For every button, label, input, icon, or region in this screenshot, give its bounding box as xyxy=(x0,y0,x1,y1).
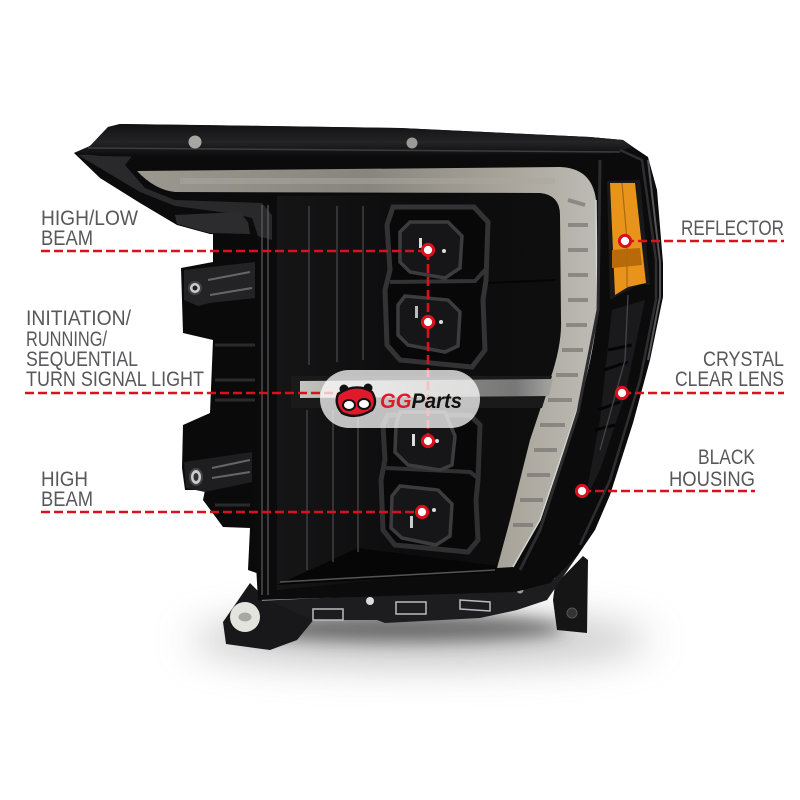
label: high/low beam: HIGH/LOW xyxy=(41,206,139,230)
line: crystal clear lens xyxy=(622,392,784,394)
label: high beam: BEAM xyxy=(41,487,93,511)
label: high/low beam: BEAM xyxy=(41,226,93,250)
inner black housing panel xyxy=(262,193,562,595)
headlight assembly xyxy=(74,124,663,650)
label: high/low beam xyxy=(41,206,139,250)
dot: reflector xyxy=(619,235,631,247)
upper hood edge xyxy=(74,124,633,157)
icon: top bolts xyxy=(188,136,418,148)
line: reflector xyxy=(625,240,784,242)
line: projector vertical link xyxy=(427,251,429,441)
right mounting tab xyxy=(553,556,588,633)
label: initiation running sequential turn signal light: RUNNING/ xyxy=(26,327,107,351)
upper projector frame xyxy=(385,207,488,367)
horizontal DRL bar xyxy=(291,376,553,408)
label: initiation running sequential turn signal light: SEQUENTIAL xyxy=(26,347,138,371)
amber reflector xyxy=(610,183,646,295)
label: high beam xyxy=(41,467,93,511)
wing reflection xyxy=(78,152,272,240)
label: black housing xyxy=(669,445,756,491)
callout lines xyxy=(25,241,784,512)
icon: GGParts mascot xyxy=(337,384,375,416)
projector lens 2 xyxy=(398,296,460,352)
line: signal light xyxy=(25,392,345,394)
line: high beam xyxy=(41,511,422,513)
label: initiation running sequential turn signal light xyxy=(26,306,204,391)
dot: lower projector 2 xyxy=(416,506,428,518)
DRL light band xyxy=(137,167,597,568)
lower projector frame xyxy=(381,412,480,552)
label: initiation running sequential turn signal light: INITIATION/ xyxy=(26,306,131,330)
floor shadow xyxy=(190,614,650,664)
logo wordmark: GGParts xyxy=(380,390,462,413)
label: black housing: BLACK xyxy=(698,445,756,469)
label: initiation running sequential turn signal light: TURN SIGNAL LIGHT xyxy=(26,367,204,391)
line: black housing xyxy=(582,490,755,492)
projector lens 4 xyxy=(391,486,452,545)
label: black housing: HOUSING xyxy=(669,467,755,491)
dot: lower projector 1 xyxy=(422,435,434,447)
main black body xyxy=(74,124,663,600)
GGParts badge xyxy=(320,370,480,428)
left mounting foot with washer xyxy=(223,583,320,650)
dot: upper projector 1 xyxy=(422,244,434,256)
label: crystal clear lens xyxy=(675,347,784,391)
dot: lens xyxy=(616,387,628,399)
right bezel xyxy=(520,150,660,570)
projector lens 3 xyxy=(395,412,455,470)
projector lens 1 xyxy=(400,222,462,278)
dot: upper projector 2 xyxy=(422,316,434,328)
dot: housing xyxy=(576,485,588,497)
callout dots xyxy=(416,235,631,518)
rear housing and mounting brackets xyxy=(181,225,262,575)
label: high beam: HIGH xyxy=(41,467,88,491)
label: crystal clear lens: CRYSTAL xyxy=(703,347,784,371)
line: high/low beam xyxy=(41,250,428,252)
bottom clear lens strip xyxy=(256,555,578,623)
